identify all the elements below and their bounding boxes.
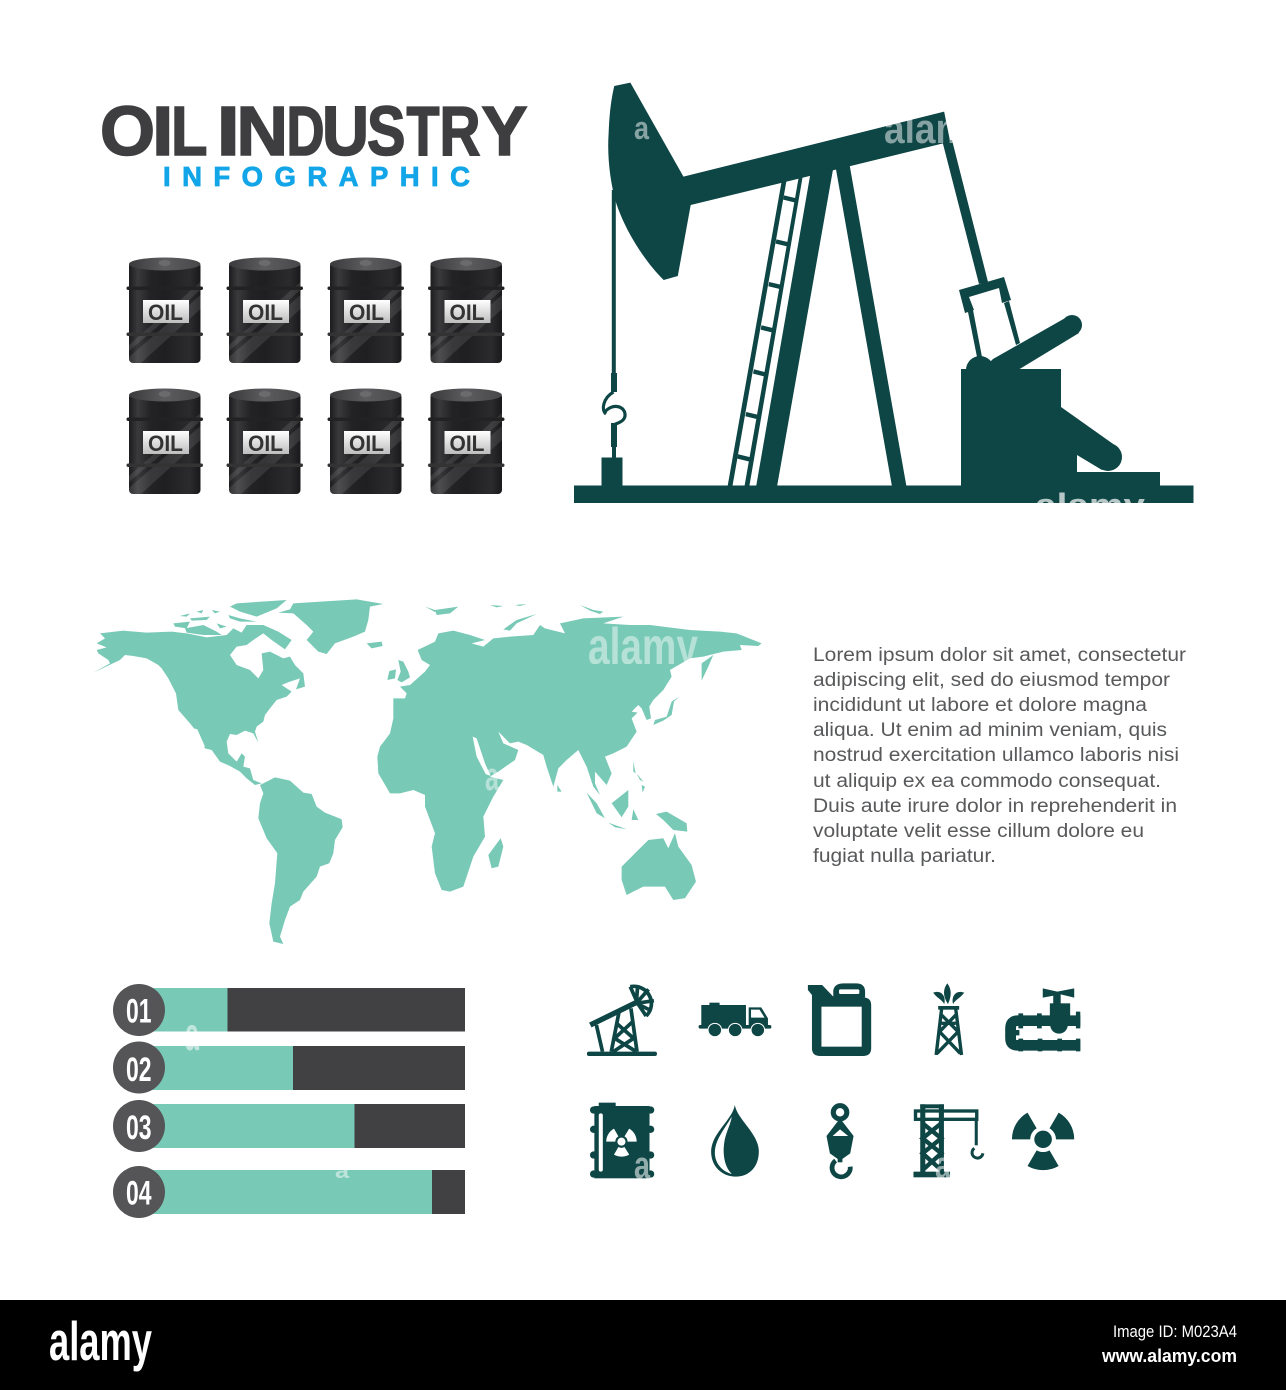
icon: barrel 6: OIL <box>248 431 283 456</box>
crank arm <box>982 315 1082 370</box>
watermarks: alamy <box>884 105 990 152</box>
pumpjack illustration <box>574 83 1194 503</box>
icon: barrel 8: OIL <box>450 431 484 456</box>
title <box>100 92 528 192</box>
icon: oil derrick gusher <box>933 983 964 1055</box>
icon: radiation symbol <box>1012 1113 1074 1170</box>
body text: voluptate velit esse cillum dolore eu <box>813 821 1144 842</box>
bar 04 <box>113 1166 465 1218</box>
heading: oil industry: U <box>322 92 369 170</box>
heading: oil industry <box>100 92 528 170</box>
icon: tower crane <box>913 1104 983 1177</box>
ladder <box>728 177 803 486</box>
bar chart <box>113 984 465 1218</box>
icon: barrel 3 <box>328 258 404 363</box>
icon: radioactive barrel <box>590 1103 654 1178</box>
icon: barrel 5 <box>126 388 203 494</box>
watermarks: a <box>335 1158 350 1183</box>
body text: Duis aute irure dolor in reprehenderit in <box>813 796 1177 817</box>
bar 02: 02 <box>126 1051 152 1089</box>
polished rod and hook <box>603 190 625 459</box>
bar 03: 03 <box>126 1109 152 1147</box>
icon: barrel 3: OIL <box>349 300 384 325</box>
icon: barrel 5: OIL <box>148 431 183 456</box>
website: www.alamy.com <box>1101 1346 1237 1366</box>
body text: ut aliquip ex ea commodo consequat. <box>813 771 1161 792</box>
heading: oil industry: L <box>171 92 208 170</box>
body text: adipiscing elit, sed do eiusmod tempor <box>813 670 1171 691</box>
footer bar <box>0 1300 1286 1390</box>
icon: barrel 1 <box>126 258 203 363</box>
heading: oil industry: Y <box>482 92 528 170</box>
body text <box>813 645 1187 867</box>
watermarks: a <box>185 1008 199 1060</box>
icon: pumpjack <box>587 985 657 1056</box>
horsehead and walking beam <box>608 83 950 280</box>
subheading: infographic: INFOGRAPHIC <box>163 161 470 192</box>
icon: oil drop <box>711 1105 759 1177</box>
bar 04: 04 <box>126 1174 152 1212</box>
icon: jerry can <box>808 983 871 1056</box>
heading: oil industry: S <box>367 92 406 170</box>
watermarks: a <box>634 1145 651 1187</box>
heading: oil industry: D <box>286 92 324 170</box>
icon: barrel 4 <box>428 258 504 363</box>
icon: pipeline valve <box>1006 988 1080 1051</box>
body text: aliqua. Ut enim ad minim veniam, quis <box>813 720 1167 741</box>
body text: Lorem ipsum dolor sit amet, consectetur <box>813 645 1187 666</box>
world map <box>93 599 762 944</box>
bar 01 <box>113 984 465 1036</box>
pitman arm and bridle <box>942 140 1020 357</box>
body text: incididunt ut labore et dolore magna <box>813 695 1147 716</box>
heading: oil industry: T <box>406 92 440 170</box>
heading: oil industry: O <box>100 92 155 170</box>
heading: oil industry: I <box>152 92 174 170</box>
heading: oil industry: R <box>440 92 480 170</box>
body text: nostrud exercitation ullamco laboris nisi <box>813 745 1179 766</box>
icon grid <box>587 983 1080 1178</box>
watermarks: a <box>935 1145 952 1187</box>
icon: barrel 4: OIL <box>450 300 484 325</box>
map: americas and greenland <box>93 599 383 944</box>
heading: oil industry: N <box>236 92 288 170</box>
icon: tanker truck <box>699 1003 771 1037</box>
panel: oil barrels <box>126 258 504 494</box>
body text: fugiat nulla pariatur. <box>813 846 996 867</box>
wellhead <box>602 458 622 486</box>
a-frame legs <box>756 165 906 486</box>
bar 02 <box>113 1042 465 1094</box>
watermarks: a <box>485 755 499 799</box>
watermarks: alamy <box>588 618 698 676</box>
icon: crane hook <box>827 1106 854 1177</box>
footer logo: alamy <box>49 1310 152 1372</box>
icon: barrel 8 <box>428 388 504 494</box>
heading: oil industry: I <box>216 92 240 170</box>
bar 01: 01 <box>126 992 152 1030</box>
watermarks <box>185 105 1145 1187</box>
image id: Image ID: M023A4 <box>1113 1322 1237 1341</box>
icon: barrel 1: OIL <box>148 300 183 325</box>
watermarks: alamy <box>1035 487 1145 523</box>
gearbox and counterweight <box>961 356 1160 486</box>
icon: barrel 7 <box>328 388 404 494</box>
icon: barrel 2 <box>226 258 303 363</box>
map: africa eurasia australia <box>377 604 762 900</box>
watermarks: a <box>634 110 649 146</box>
icon: barrel 2: OIL <box>248 300 283 325</box>
icon: barrel 6 <box>226 388 303 494</box>
bar 03 <box>113 1100 465 1152</box>
ground base <box>574 486 1194 503</box>
icon: barrel 7: OIL <box>349 431 384 456</box>
